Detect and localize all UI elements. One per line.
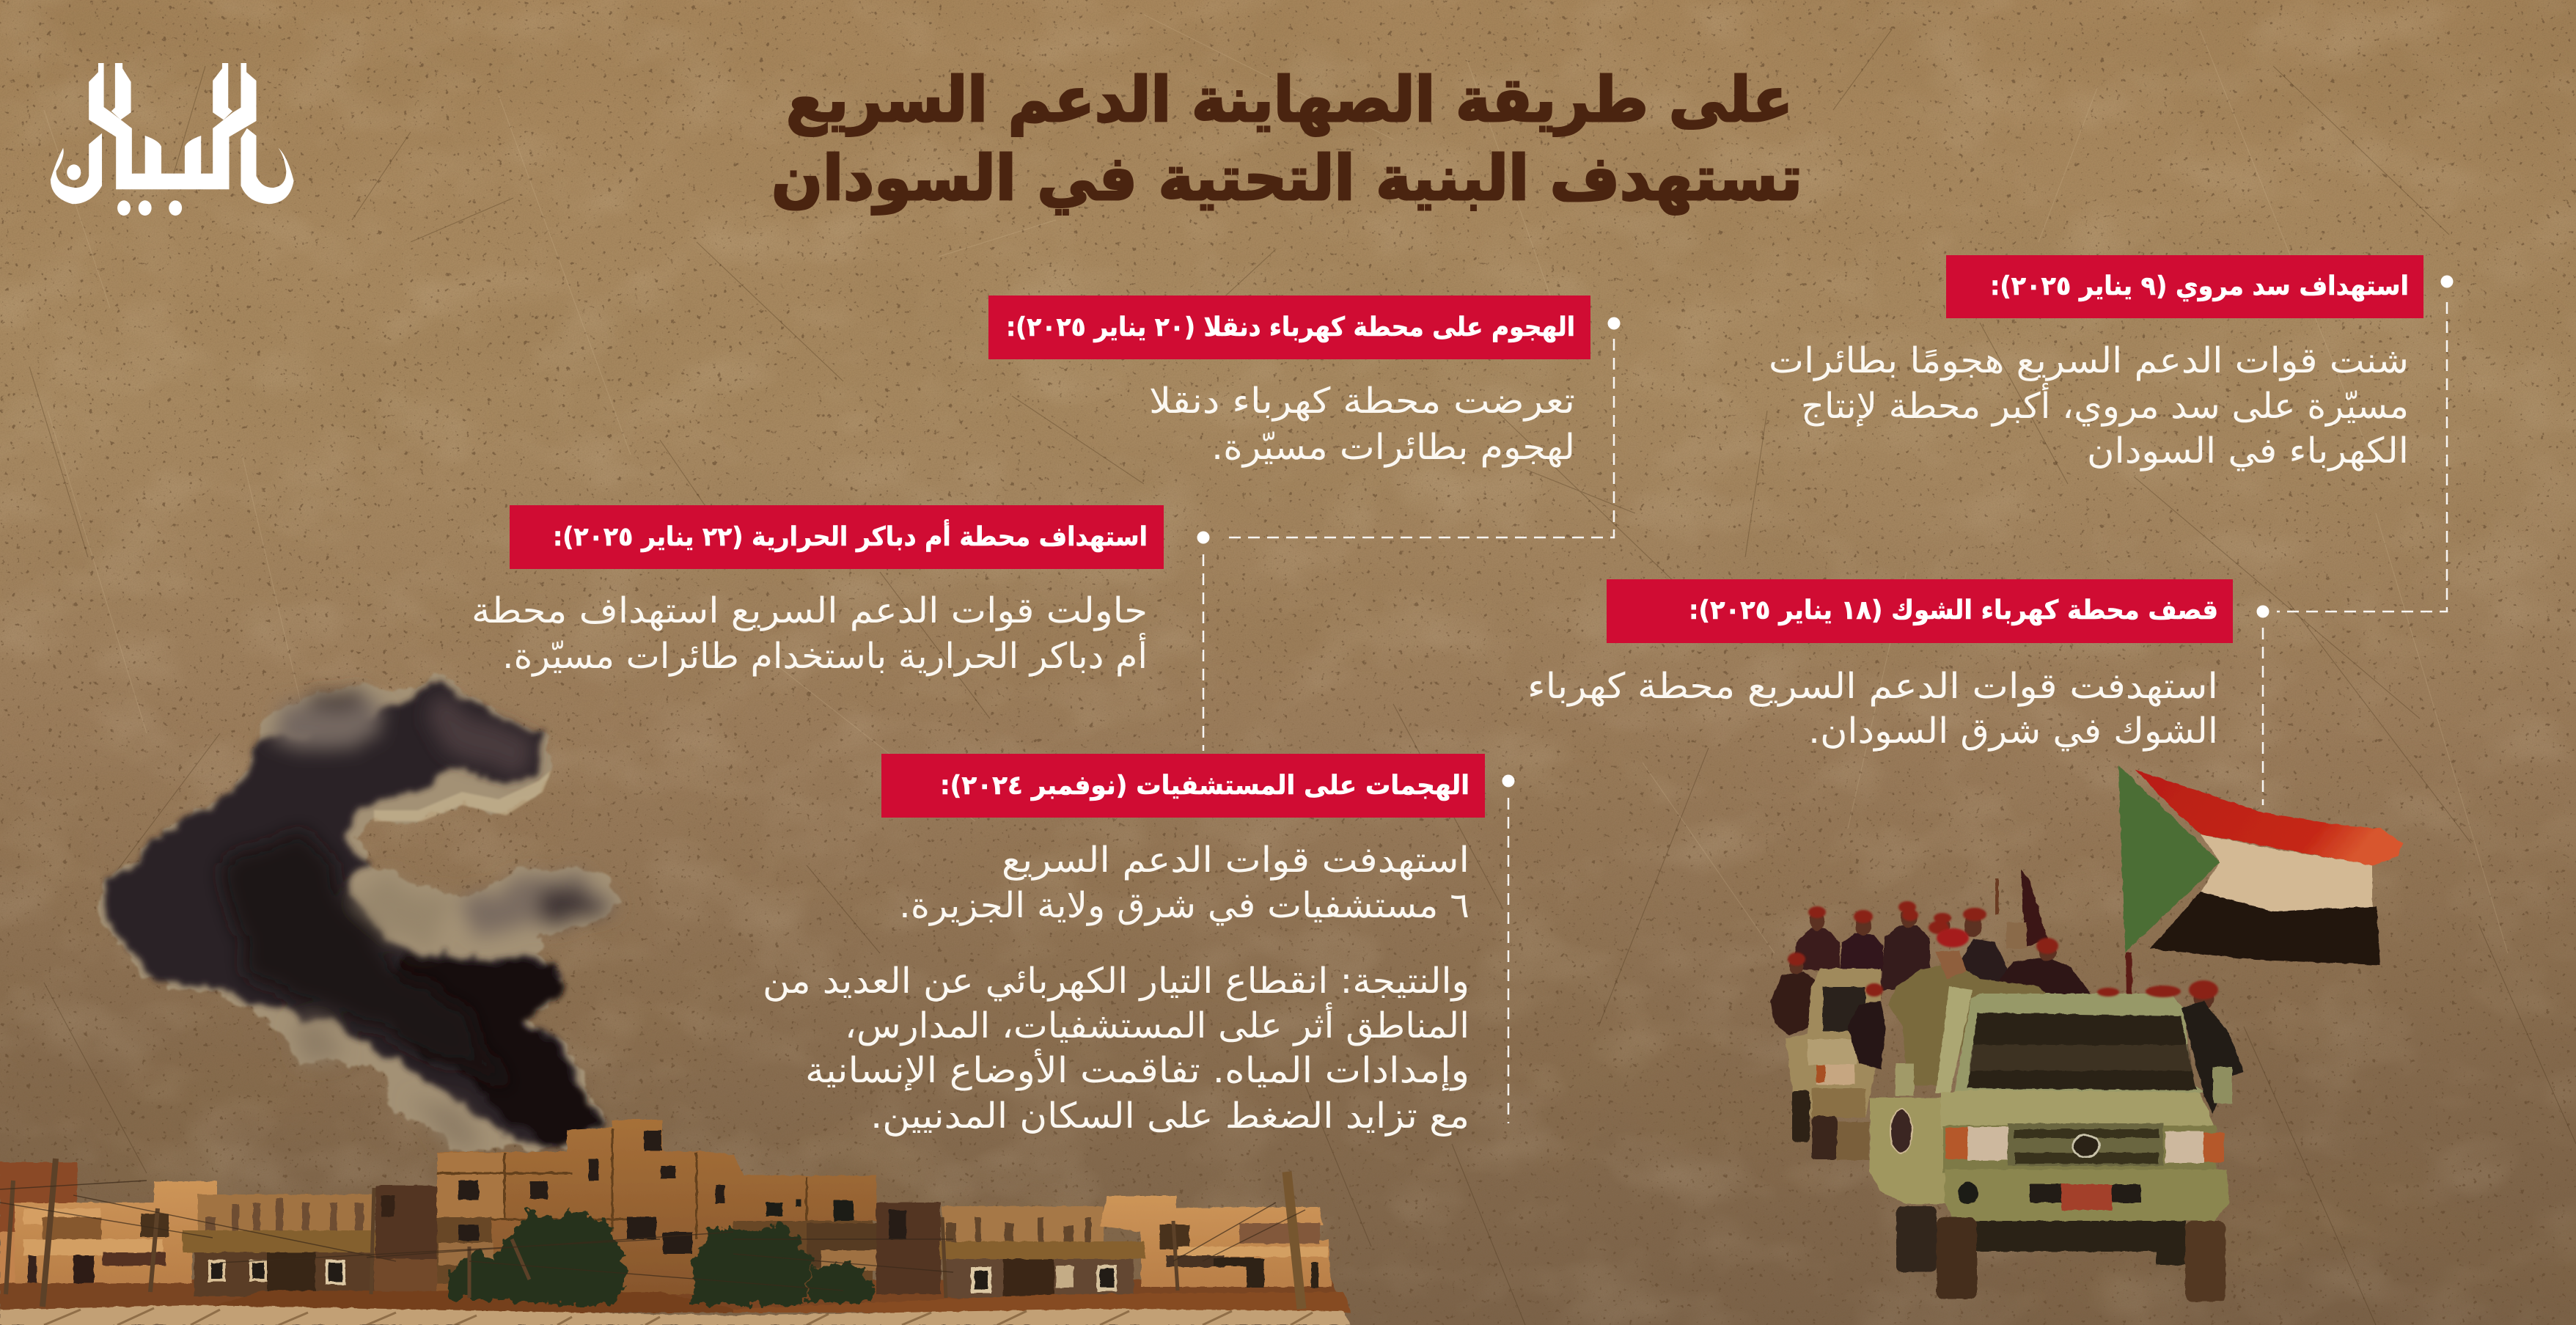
windshield bbox=[1967, 1013, 2196, 1090]
panel: Merowe Dam attack: مسيّرة على سد مروي، أكبر محطة لإنتاج bbox=[1801, 383, 2409, 427]
panel: Dongola power station attack bbox=[988, 296, 1590, 468]
panel: Shouk power station bombing: استهدفت قوات الدعم السريع محطة كهرباء bbox=[1527, 666, 2218, 707]
heads bbox=[1789, 908, 2214, 1009]
soldier by door bbox=[1848, 1001, 1886, 1069]
A pillar bbox=[1936, 986, 1973, 1093]
title: على طريقة الصهاينة الدعم السريع bbox=[786, 64, 1793, 136]
panel: attacks on hospitals and result: المناطق أثر على المستشفيات، المدارس، bbox=[845, 1002, 1469, 1046]
main truck side + door bbox=[1870, 1098, 1945, 1204]
berets bbox=[1788, 901, 2218, 999]
panel: Dongola power station attack: لهجوم بطائرات مسيّرة. bbox=[1211, 427, 1575, 468]
panel: Merowe Dam attack: شنت قوات الدعم السريع هجومًا بطائرات bbox=[1769, 340, 2409, 381]
grille area bbox=[1943, 1126, 2216, 1173]
illustration: bombed town buildings bbox=[0, 1120, 1351, 1325]
officer bbox=[1888, 962, 2046, 1085]
illustration: military trucks with soldiers bbox=[1771, 870, 2244, 1302]
power lines bbox=[0, 1181, 1305, 1291]
back row soldiers bbox=[1792, 928, 1840, 972]
roof ribs bbox=[44, 1308, 1313, 1325]
timeline dashed connectors bbox=[1203, 302, 2447, 1123]
panel: Um Dabakir thermal station: استهداف محطة أم دباكر الحرارية (٢٢ يناير ٢٠٢٥): bbox=[553, 519, 1148, 552]
panel: Merowe Dam attack bbox=[1769, 255, 2423, 471]
trees bbox=[444, 1208, 873, 1305]
panel: Merowe Dam attack: استهداف سد مروي (٩ يناير ٢٠٢٥): bbox=[1990, 271, 2409, 301]
illustration: Sudanese flag bbox=[2118, 766, 2403, 997]
panel: attacks on hospitals and result: الهجمات على المستشفيات (نوفمبر ٢٠٢٤): bbox=[940, 771, 1469, 801]
title: تستهدف البنية التحتية في السودان bbox=[771, 142, 1802, 215]
panel: attacks on hospitals and result: والنتيجة: انقطاع التيار الكهربائي عن العديد من bbox=[763, 961, 1469, 1002]
illustration: smoke plume bbox=[100, 672, 622, 1150]
panel: Merowe Dam attack: الكهرباء في السودان bbox=[2087, 430, 2409, 471]
panel: attacks on hospitals and result: استهدفت قوات الدعم السريع bbox=[1002, 840, 1469, 881]
panel: Um Dabakir thermal station: أم دباكر الحرارية باستخدام طائرات مسيّرة. bbox=[502, 633, 1148, 677]
panel: Shouk power station bombing: قصف محطة كهرباء الشوك (١٨ يناير ٢٠٢٥): bbox=[1689, 595, 2218, 625]
timeline dots bbox=[1197, 276, 2454, 788]
bumper bbox=[1945, 1170, 2229, 1221]
utility poles bbox=[6, 1159, 1302, 1309]
panel: attacks on hospitals and result: ٦ مستشفيات في شرق ولاية الجزيرة. bbox=[899, 885, 1469, 926]
second truck bbox=[1786, 969, 1881, 1117]
panel: Shouk power station bombing bbox=[1527, 579, 2233, 752]
panel: attacks on hospitals and result: مع تزايد الضغط على السكان المدنيين. bbox=[870, 1095, 1469, 1137]
chassis + wheels bbox=[1976, 1221, 2185, 1252]
panel: Shouk power station bombing: الشوك في شرق السودان. bbox=[1808, 711, 2218, 752]
panel: Um Dabakir thermal station: حاولت قوات الدعم السريع استهداف محطة bbox=[471, 590, 1148, 631]
back pennant and rack bbox=[2021, 870, 2047, 947]
panel: Um Dabakir thermal station bbox=[471, 505, 1164, 677]
panel: attacks on hospitals and result: وإمدادات المياه. تفاقمت الأوضاع الإنسانية bbox=[805, 1048, 1469, 1091]
panel: attacks on hospitals and result bbox=[763, 754, 1485, 1137]
logo: Al-Bayan calligraphic mark bbox=[51, 63, 294, 216]
hood bbox=[1941, 1090, 2214, 1129]
title bbox=[771, 64, 1802, 215]
right soldier bbox=[2181, 1001, 2244, 1115]
panel: Dongola power station attack: تعرضت محطة كهرباء دنقلا bbox=[1149, 381, 1575, 422]
panel: Dongola power station attack: الهجوم على محطة كهرباء دنقلا (٢٠ يناير ٢٠٢٥): bbox=[1006, 312, 1575, 342]
roof bbox=[1954, 994, 2206, 1093]
